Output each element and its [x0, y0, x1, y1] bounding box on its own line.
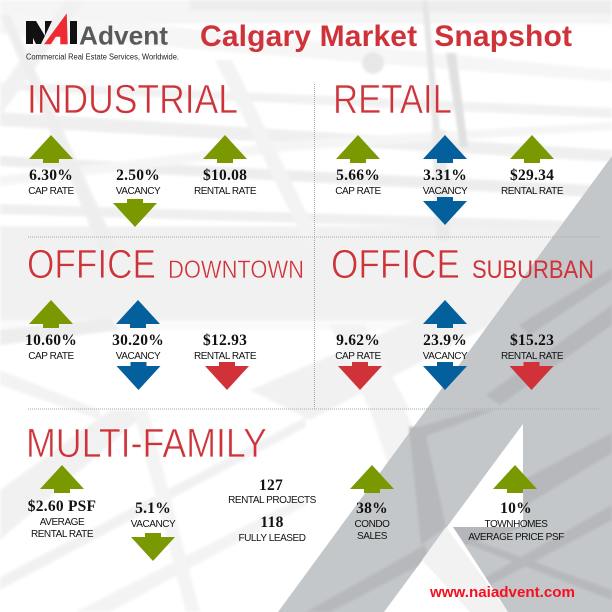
metric: cap rate up: 5.66% [336, 167, 380, 184]
gray triangle overlay [278, 156, 612, 612]
metric: rental projects: RENTAL PROJECTS [228, 495, 317, 506]
heading: office suburban [331, 241, 594, 287]
metric: average rental rate up [28, 465, 96, 540]
metric: rental rate up: $10.08 [203, 167, 247, 184]
metric: rental rate down: $15.23 [510, 332, 554, 349]
metric: vacancy up and down [423, 300, 468, 390]
metric: cap rate up [28, 135, 75, 197]
metric: rental rate down: $12.93 [203, 332, 247, 349]
metric: condo sales up [350, 465, 394, 542]
heading: industrial: INDUSTRIAL [27, 76, 238, 122]
metric: cap rate up [25, 300, 77, 362]
logo: NAI Advent: Advent [79, 20, 168, 50]
metric: rental projects: 127 [259, 477, 283, 494]
metric: cap rate down [335, 332, 382, 390]
metric: cap rate up: CAP RATE [335, 186, 382, 197]
panel: retail [333, 76, 564, 225]
metric: vacancy up and down: 23.9% [423, 332, 467, 349]
metric: rental rate down [501, 332, 564, 390]
metric: vacancy up and down: 30.20% [112, 332, 164, 349]
metric: vacancy down: 5.1% [135, 500, 171, 517]
panel: office downtown [25, 241, 304, 390]
dotted dividers [28, 84, 600, 409]
metric: condo sales up: CONDO [355, 519, 390, 530]
metric: rental rate up [501, 135, 564, 197]
heading: office downtown: DOWNTOWN [168, 256, 304, 284]
heading: office downtown: OFFICE [27, 241, 156, 287]
logo: NAI Advent [26, 12, 179, 62]
metric: cap rate up: CAP RATE [28, 351, 75, 362]
panel: industrial [27, 76, 257, 227]
metric: fully leased: 118 [260, 514, 284, 531]
heading: multi-family: MULTI-FAMILY [26, 420, 267, 466]
heading: office suburban: SUBURBAN [472, 256, 594, 284]
metric: condo sales up: 38% [356, 500, 388, 517]
metric: rental rate up [194, 135, 257, 197]
metric: townhomes up: AVERAGE PRICE PSF [468, 532, 564, 543]
metric: vacancy down: VACANCY [116, 186, 161, 197]
metric: rental rate down [194, 332, 257, 390]
metric: condo sales up: SALES [357, 531, 388, 542]
metric: fully leased: FULLY LEASED [238, 533, 306, 544]
title: Calgary Market Snapshot [200, 20, 572, 53]
metric: townhomes up [468, 465, 564, 543]
metric: rental rate up: RENTAL RATE [501, 186, 564, 197]
metric: average rental rate up: $2.60 PSF [28, 498, 96, 515]
metric: rental rate up: RENTAL RATE [194, 186, 257, 197]
metric: vacancy down: VACANCY [131, 519, 176, 530]
metric: cap rate up: 6.30% [29, 167, 73, 184]
metric: townhomes up: TOWNHOMES [484, 519, 548, 530]
metric: vacancy up and down [423, 135, 468, 225]
metric: vacancy up and down [112, 300, 164, 390]
metric: rental projects [228, 477, 317, 506]
heading: retail: RETAIL [333, 76, 452, 122]
metric: vacancy up and down: VACANCY [116, 351, 161, 362]
metric: cap rate down: 9.62% [336, 332, 380, 349]
heading: office downtown [27, 241, 304, 287]
metric: vacancy down [131, 500, 176, 561]
metric: vacancy up and down: VACANCY [423, 186, 468, 197]
metric: vacancy down: 2.50% [116, 167, 160, 184]
metric: average rental rate up: AVERAGE [40, 517, 85, 528]
metric: cap rate up: 10.60% [25, 332, 77, 349]
metric: rental rate down: RENTAL RATE [501, 351, 564, 362]
metric: cap rate up: CAP RATE [28, 186, 75, 197]
metric: townhomes up: 10% [500, 500, 532, 517]
metric: vacancy up and down: 3.31% [423, 167, 467, 184]
metric: average rental rate up: RENTAL RATE [31, 529, 94, 540]
metric: rental rate down: RENTAL RATE [194, 351, 257, 362]
white triangle cutout [384, 424, 523, 612]
metric: cap rate up [335, 135, 382, 197]
panel: multi-family [26, 420, 564, 561]
metric: cap rate down: CAP RATE [335, 351, 382, 362]
panel: office suburban [331, 241, 594, 390]
heading: office suburban: OFFICE [331, 241, 460, 287]
metric: rental rate up: $29.34 [510, 167, 554, 184]
logo: NAI Advent: Commercial Real Estate Services, Worldwide. [26, 52, 179, 62]
metric: vacancy up and down: VACANCY [423, 351, 468, 362]
website url: www.naiadvent.com [429, 584, 575, 601]
metric: vacancy down [113, 167, 161, 227]
metric: fully leased [238, 514, 306, 544]
